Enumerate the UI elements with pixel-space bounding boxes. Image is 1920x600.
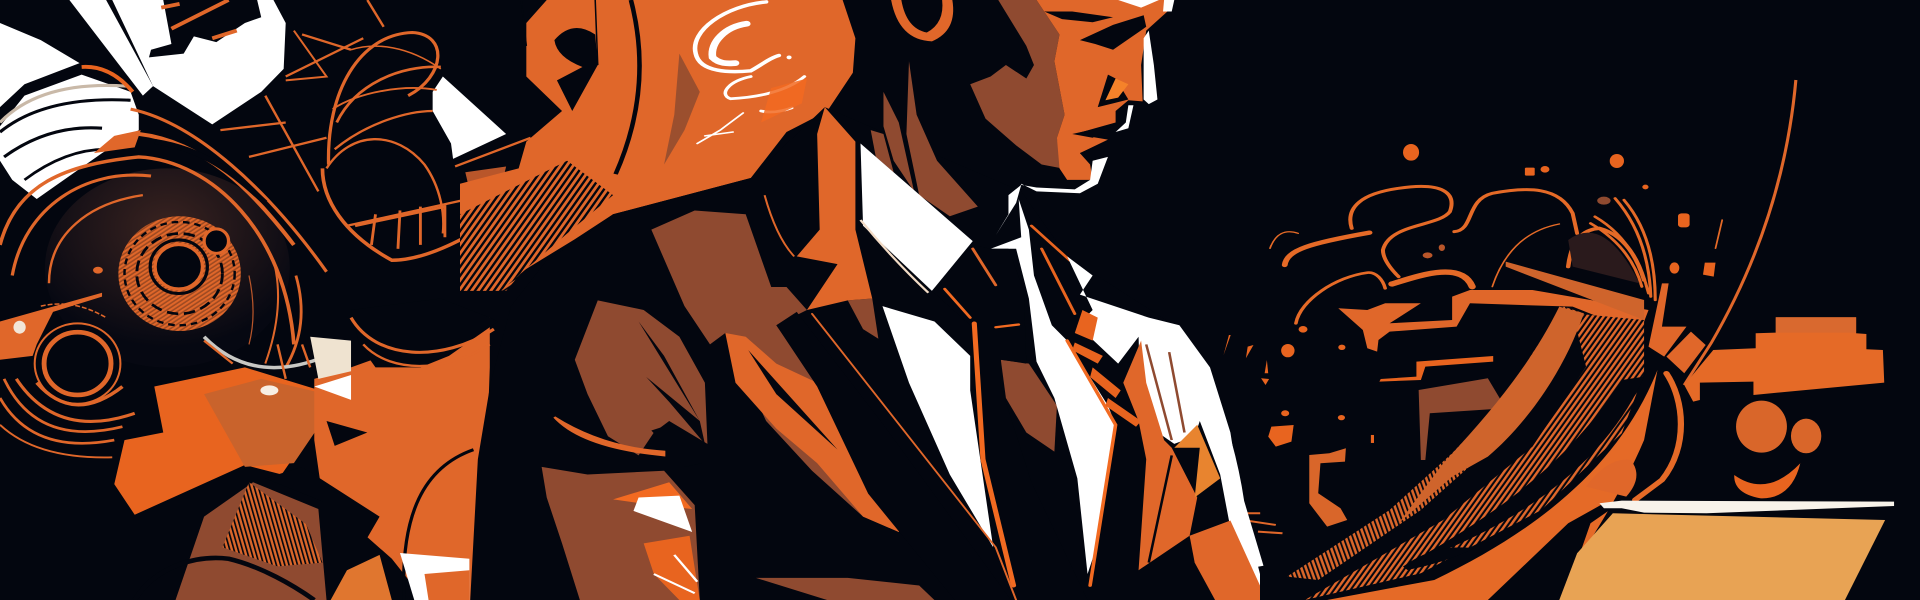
white shirt front left [882,306,993,547]
stair blocks [1649,283,1884,402]
dark disc with arcs [0,109,327,367]
panel: abstract swooshes on the right [1224,80,1894,600]
orange suspender beads [1072,310,1141,427]
splatter bird shape [1338,290,1649,352]
orange jacket highlight [725,333,912,532]
black folds on sleeve [639,312,1011,600]
black head lines [616,0,640,174]
panel: abstract machinery on the left [0,0,604,600]
hatch strip on blob [460,161,613,291]
eye shape [554,28,598,111]
brown sleeve panels [542,210,1057,600]
orange sleeve accents [554,417,700,600]
small ring and wave lines [0,293,327,457]
panel: orange head silhouette behind the man [460,0,855,291]
black tie [932,245,1088,600]
ear ring [891,0,953,41]
white squiggle marks [695,2,804,144]
face [1037,0,1172,180]
face highlights [996,0,1174,235]
textured ring gear [93,216,241,331]
eye and brow [1044,11,1146,160]
orange blob [460,0,855,291]
smiling face circles [1734,401,1821,498]
white shoulder shirt [1067,256,1260,600]
bright orange glow [761,78,807,122]
white shirt front right [991,199,1116,574]
wire swirl net [161,0,555,260]
white collar [861,144,973,291]
main swoosh [1287,233,1657,600]
dark wedge under the swoosh [1488,502,1622,600]
tie and lapel orange lines [812,226,1116,600]
darker head shading [664,54,700,165]
white outer shoulder edge [1200,364,1260,566]
hatched fan [469,161,604,291]
face shadow [970,0,1065,168]
orange neck [797,107,872,310]
hair strands [871,61,978,216]
white paper shapes top left [0,0,506,159]
black jacket silhouette [470,107,1260,600]
small stair outline [1379,356,1506,460]
long thin curve [1684,80,1796,385]
scattered dots [1224,144,1716,533]
tan laptop panel [1559,513,1885,600]
white laptop edge [1599,501,1894,513]
flourish strokes [1270,186,1722,500]
white rings top left [0,67,139,199]
panel: man in suit [470,0,1260,600]
orange paper stack lower left [114,299,498,600]
orange jacket right side [1123,341,1260,600]
